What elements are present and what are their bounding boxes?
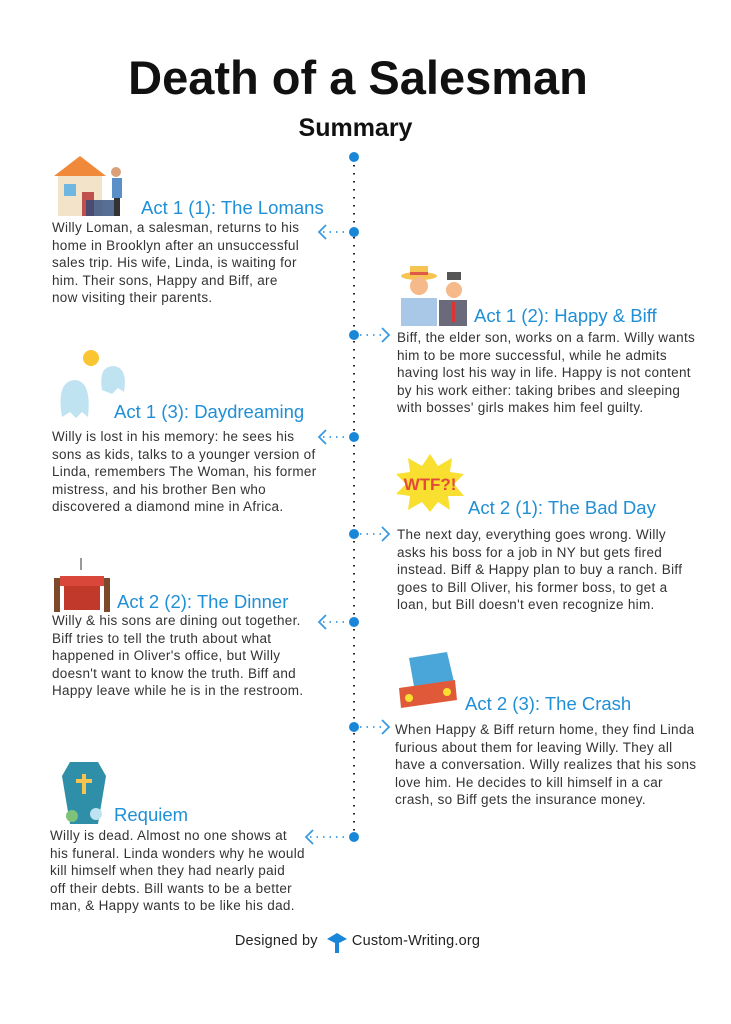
text: act 2 (2): [52, 613, 303, 698]
text: act 2 (1): asks his boss for a job in NY but gets fired: [397, 545, 662, 560]
text: act 1 (1): him. Their sons, Happy and Biff, are: [52, 273, 278, 288]
text: act 2 (1): instead. Biff & Happy plan to buy a ranch. Biff: [397, 562, 682, 577]
text: act 2 (2): happened in Oliver's office, but Willy: [52, 648, 280, 663]
text: act 2 (3): crash, so Biff gets the insurance money.: [395, 792, 646, 807]
heading: act 2 (1): Act 2 (1): The Bad Day: [468, 497, 656, 518]
text: act 2 (2): Biff tries to tell the truth about what: [52, 631, 271, 646]
text: act 2 (1): The next day, everything goes wrong. Willy: [397, 527, 666, 542]
heading: act 1 (1): Act 1 (1): The Lomans: [141, 197, 324, 218]
text: requiem: [50, 828, 305, 913]
text: act 2 (3): When Happy & Biff return home, they find Linda: [395, 722, 694, 737]
text: act 2 (1): loan, but Bill doesn't even recognize him.: [397, 597, 655, 612]
text: act 1 (2): with bosses' girls makes him feel guilty.: [397, 400, 643, 415]
text: act 1 (3): discovered a diamond mine in Africa.: [52, 499, 283, 514]
text: act 2 (3): furious about them for leaving Willy. They all: [395, 740, 672, 755]
text: act 1 (2): him to be more successful, while he admits: [397, 348, 667, 363]
text: act 2 (3): have a conversation. Willy realizes that his sons: [395, 757, 696, 772]
text: act 1 (2): Biff, the elder son, works on a farm. Willy wants: [397, 330, 695, 345]
text: requiem: his funeral. Linda wonders why he would: [50, 846, 305, 861]
text: act 1 (1): Willy Loman, a salesman, returns to his: [52, 220, 299, 235]
icon: two men: [401, 266, 467, 326]
text: act 1 (3): mistress, and his brother Ben who: [52, 482, 266, 497]
subtitle: Summary: [299, 114, 412, 142]
text: act 1 (3): [52, 429, 316, 514]
text: act 1 (2): having lost his way in life. Happy is not content: [397, 365, 691, 380]
text: act 1 (1): home in Brooklyn after an unsuccessful: [52, 238, 299, 253]
icon: coffin: [62, 762, 106, 824]
text: act 2 (1): goes to Bill Oliver, his former boss, to get a: [397, 580, 667, 595]
icon: house: [54, 156, 122, 216]
heading: act 2 (2): Act 2 (2): The Dinner: [117, 591, 288, 612]
text: act 1 (2): by his work either: taking bribes and sleeping: [397, 383, 680, 398]
text: act 1 (3): Willy is lost in his memory: he sees his: [52, 429, 294, 444]
heading: act 2 (3): Act 2 (3): The Crash: [465, 693, 631, 714]
text: act 2 (2): doesn't want to know the truth. Biff and: [52, 666, 296, 681]
text: requiem: man, & Happy wants to be like his dad.: [50, 898, 295, 913]
icon: dinner table: [54, 558, 110, 612]
text: act 2 (3): [395, 722, 696, 807]
heading: act 1 (2): Act 1 (2): Happy & Biff: [474, 305, 657, 326]
heading: requiem: Requiem: [114, 804, 188, 825]
icon: ghosts and sun: [60, 350, 125, 418]
text: requiem: Willy is dead. Almost no one shows at: [50, 828, 287, 843]
text: act 1 (1): now visiting their parents.: [52, 290, 212, 305]
text: act 2 (2): Willy & his sons are dining out together.: [52, 613, 301, 628]
text: act 2 (3): love him. He decides to kill himself in a car: [395, 775, 663, 790]
text: act 1 (2): [397, 330, 695, 415]
text: act 1 (1): [52, 220, 299, 305]
text: act 2 (1): [397, 527, 682, 612]
title: Death of a Salesman: [128, 51, 588, 104]
icon: crashed car: [399, 652, 457, 708]
icon: WTF burst: WTF?!: [404, 475, 456, 494]
text: act 1 (3): sons as kids, talks to a younger version of: [52, 447, 316, 462]
text: requiem: off their debts. Bill wants to be a better: [50, 881, 292, 896]
text: requiem: kill himself when they had nearly paid: [50, 863, 285, 878]
footer: Designed by Custom-Writing.org: [235, 933, 480, 949]
text: act 2 (2): Happy leave while he is in the restroom.: [52, 683, 303, 698]
icon: WTF burst: [396, 454, 464, 512]
heading: act 1 (3): Act 1 (3): Daydreaming: [114, 401, 304, 422]
text: act 1 (1): sales trip. His wife, Linda, is waiting for: [52, 255, 297, 270]
text: act 1 (3): Linda, remembers The Woman, his former: [52, 464, 316, 479]
